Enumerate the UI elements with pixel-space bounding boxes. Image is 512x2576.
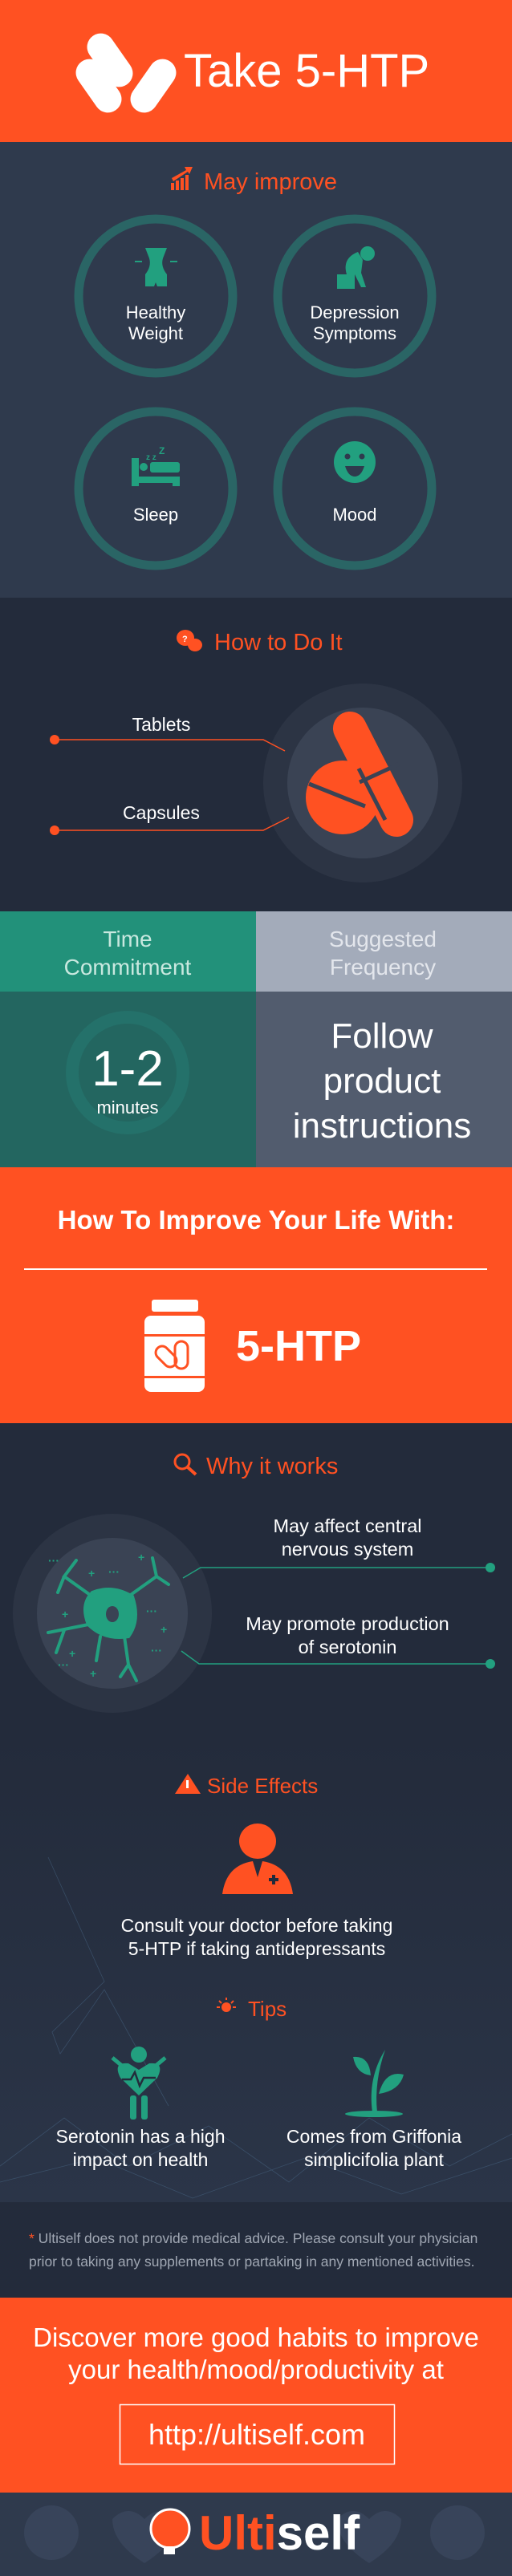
icon: doctor [222, 1823, 293, 1894]
neuron illustration: ··· [58, 1658, 69, 1671]
footer call to action [0, 2298, 512, 2493]
circle: healthy weight [79, 219, 233, 373]
neuron illustration: + [62, 1608, 68, 1621]
panel: time commitment: minutes [96, 1097, 159, 1118]
neuron illustration: + [161, 1623, 167, 1636]
heading: why it works: Why it works [206, 1454, 338, 1479]
heading: tips: Tips [248, 1997, 286, 2021]
callout: serotonin: May promote production [246, 1613, 449, 1634]
icon: bed: z z [146, 453, 156, 462]
pills illustration [263, 684, 462, 882]
callout: central nervous system [183, 1515, 495, 1578]
neuron illustration: ··· [108, 1565, 120, 1578]
text: consult doctor: Consult your doctor before taking [121, 1915, 392, 1936]
heading: how to do it: ? [182, 635, 188, 644]
callout: serotonin: of serotonin [299, 1637, 396, 1657]
circle: mood [278, 412, 432, 566]
panel: suggested frequency: instructions [293, 1106, 471, 1146]
text: consult doctor: 5-HTP if taking antidepressants [128, 1938, 385, 1959]
footer call to action: your health/mood/productivity at [68, 2355, 444, 2384]
neuron illustration: + [90, 1667, 96, 1680]
icon: smiley [334, 441, 376, 483]
icon: clock background [66, 1011, 189, 1134]
disclaimer: prior to taking any supplements or partaking in any mentioned activities. [29, 2253, 474, 2270]
panel: why it works [0, 1423, 512, 1737]
panel: suggested frequency: Follow [331, 1016, 433, 1056]
header [0, 0, 512, 142]
neuron illustration: ··· [151, 1644, 162, 1657]
icon: bed: Z [159, 445, 165, 456]
neuron illustration: + [88, 1567, 95, 1580]
panel: suggested frequency: product [323, 1061, 441, 1101]
tip: plant: simplicifolia plant [304, 2149, 445, 2170]
icon: pills [71, 28, 181, 118]
panel: side effects and tips [0, 1737, 512, 2202]
panel: suggested frequency: Suggested [329, 927, 437, 951]
tip: plant [286, 2050, 461, 2170]
callout: central nervous system: nervous system [282, 1539, 413, 1560]
neuron illustration: ··· [48, 1554, 59, 1567]
neuron illustration: + [138, 1551, 144, 1564]
footer call to action: Discover more good habits to improve [33, 2322, 479, 2352]
heading: side effects: Side Effects [207, 1774, 318, 1798]
text: consult doctor [121, 1915, 392, 1959]
label: capsules [50, 802, 289, 835]
panel: may improve [0, 142, 512, 598]
icon: waist [135, 248, 177, 286]
icon: sad person [337, 246, 375, 289]
heading: how to do it: How to Do It [214, 630, 343, 655]
heading: tips [217, 1997, 286, 2021]
logo: Ultiself [199, 2506, 360, 2560]
icon: bottle [144, 1300, 205, 1392]
circle: healthy weight: Weight [128, 323, 183, 343]
panel: time commitment: Time [103, 927, 152, 951]
panel: suggested frequency [256, 911, 512, 1167]
circle: healthy weight: Healthy [126, 302, 185, 323]
title: Take 5-HTP [184, 45, 429, 97]
footer logo band [0, 2493, 512, 2576]
panel: time commitment [0, 911, 256, 1167]
panel: how to improve [0, 1167, 512, 1423]
circle: mood: Mood [332, 505, 377, 525]
neuron illustration: ··· [146, 1604, 157, 1617]
panel: time commitment: Commitment [64, 955, 192, 980]
tip: serotonin [56, 2047, 225, 2170]
tip: serotonin: Serotonin has a high [56, 2126, 225, 2147]
icon: bed [132, 445, 180, 486]
panel: suggested frequency: Frequency [330, 955, 436, 980]
neuron illustration [13, 1514, 212, 1713]
panel: time commitment: 1-2 [91, 1041, 164, 1097]
label: tablets [50, 714, 285, 751]
button: url [120, 2405, 395, 2464]
tip: serotonin: impact on health [73, 2149, 208, 2170]
label: tablets: Tablets [132, 714, 190, 735]
circle: depression symptoms [278, 219, 432, 373]
tip: plant: Comes from Griffonia [286, 2126, 461, 2147]
heading: may improve: May improve [204, 169, 337, 195]
panel: how to improve: How To Improve Your Life With: [58, 1205, 454, 1235]
callout: central nervous system: May affect central [273, 1515, 422, 1536]
circle: sleep: Sleep [133, 505, 178, 525]
label: capsules: Capsules [123, 802, 200, 823]
callout: serotonin [181, 1613, 495, 1669]
panel: how to do it [0, 598, 512, 911]
button: url: http://ultiself.com [148, 2418, 365, 2451]
disclaimer [0, 2202, 512, 2298]
circle: sleep [79, 412, 233, 566]
circle: depression symptoms: Symptoms [313, 323, 396, 343]
panel: how to improve: 5-HTP [236, 1322, 361, 1370]
circle: depression symptoms: Depression [310, 302, 400, 323]
disclaimer: * Ultiself does not provide medical advice. Please consult your physician [29, 2230, 477, 2246]
neuron illustration: + [69, 1647, 75, 1660]
